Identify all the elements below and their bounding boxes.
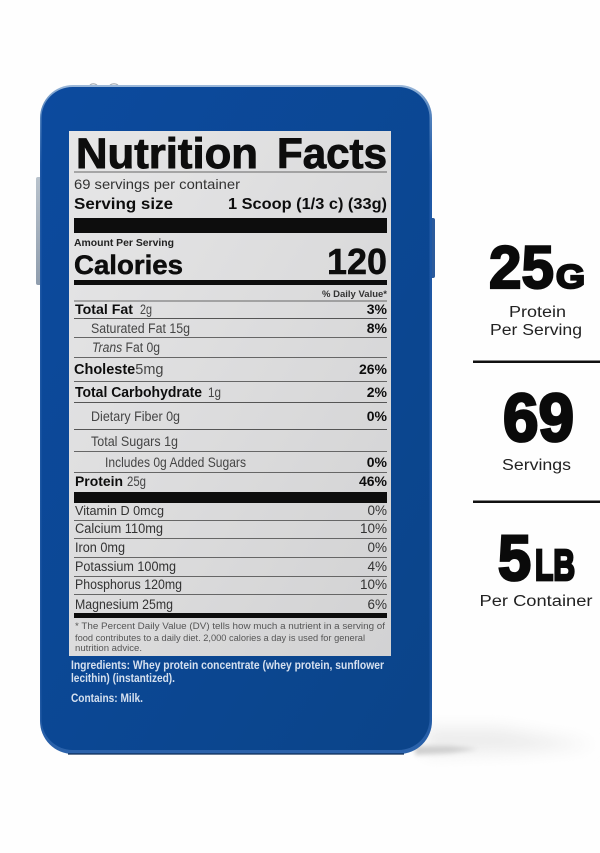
footnote: [75, 621, 386, 653]
case body: [40, 85, 432, 754]
nutrient rows: 25g: [127, 473, 146, 489]
serving size: Serving size: [74, 196, 173, 213]
nutrient rows: Saturated Fat 15g: [91, 321, 190, 336]
nutrient rows: Total Sugars 1g: [91, 433, 178, 449]
nutrient rows: Total Carbohydrate: [75, 385, 202, 401]
nutrient rows: 46%: [359, 473, 388, 489]
vitamins and minerals: Phosphorus 120mg: [75, 577, 182, 592]
amount per serving: Amount Per Serving: [74, 238, 174, 249]
nutrient rows: 1g: [208, 384, 221, 400]
nutrient rows: Dietary Fiber 0g: [91, 408, 180, 424]
ingredients text: lecithin) (instantized).: [71, 673, 175, 685]
vitamins and minerals: Iron 0mg: [75, 540, 125, 555]
stat label: protein per serving: Protein: [509, 304, 566, 321]
nutrient rows: Total Fat: [75, 301, 133, 317]
stat label: protein per serving: [490, 304, 582, 339]
vitamins and minerals: Magnesium 25mg: [75, 597, 173, 612]
vitamins and minerals: Calcium 110mg: [75, 521, 163, 536]
calories: Calories: [74, 250, 183, 280]
vitamins and minerals: 0%: [367, 503, 387, 518]
ingredients text: [71, 660, 384, 705]
calories: 120: [327, 241, 387, 282]
vitamins and minerals: [74, 503, 387, 612]
side button: left: [36, 177, 42, 285]
side button: right: [430, 218, 435, 278]
daily value header: % Daily Value*: [322, 289, 387, 300]
footnote: food contributes to a daily diet. 2,000 calories a day is used for general: [75, 633, 365, 643]
title: Nutrition: [76, 130, 258, 178]
vitamins and minerals: 6%: [367, 597, 387, 612]
stat value: 5LB: 5: [498, 522, 531, 594]
title: Facts: [277, 130, 387, 178]
nutrient rows: 0%: [367, 408, 388, 424]
serving size: [74, 196, 387, 213]
stat label: protein per serving: Per Serving: [490, 322, 582, 339]
vitamins and minerals: 0%: [367, 540, 387, 555]
vitamins and minerals: 10%: [360, 577, 387, 592]
title: [76, 130, 387, 178]
vitamins and minerals: Vitamin D 0mcg: [75, 503, 164, 518]
stat value: 69: 69: [503, 380, 574, 456]
nutrient rows: 26%: [359, 361, 388, 377]
nutrient rows: Trans Fat 0g: [92, 340, 160, 355]
nutrient rows: [74, 300, 388, 489]
stat value: 25G: G: [556, 258, 585, 295]
stat: per container: [480, 522, 592, 610]
stat: protein per serving: [489, 234, 585, 339]
stat value: 25G: [489, 234, 585, 301]
stat label: per container: Per Container: [480, 593, 592, 610]
nutrient rows: Protein: [75, 473, 123, 489]
nutrient rows: Choleste5mg: [74, 362, 163, 378]
vitamins and minerals: Potassium 100mg: [75, 559, 176, 574]
case bottom edge: [68, 753, 404, 755]
ingredients text: Contains: Milk.: [71, 693, 143, 705]
ingredients text: Ingredients: Whey protein concentrate (whey protein, sunflower: [71, 660, 384, 672]
nutrient rows: 3%: [367, 301, 388, 317]
serving size: 1 Scoop (1/3 c) (33g): [228, 196, 387, 213]
servings per container: 69 servings per container: [74, 176, 240, 192]
case shadow: [415, 728, 595, 755]
label background: [69, 131, 391, 656]
footnote: * The Percent Daily Value (DV) tells how much a nutrient in a serving of: [75, 621, 386, 631]
panel: nutrition label: [69, 130, 391, 656]
nutrient rows: 8%: [367, 320, 388, 336]
vitamins and minerals: 10%: [360, 521, 387, 536]
footnote: nutrition advice.: [75, 643, 142, 653]
calories: [74, 241, 387, 282]
nutrient rows: Includes 0g Added Sugars: [105, 454, 246, 470]
stat value: 5LB: LB: [535, 541, 575, 590]
nutrient rows: 2%: [367, 384, 388, 400]
stat label: servings: Servings: [502, 457, 571, 474]
stat value: 25G: 25: [489, 234, 554, 301]
case face: [42, 87, 430, 750]
product case: [36, 84, 435, 754]
vitamins and minerals: 4%: [367, 559, 387, 574]
stat: servings: [502, 380, 574, 474]
top buttons: [90, 84, 118, 85]
nutrient rows: 0%: [367, 454, 388, 470]
nutrient rows: 2g: [140, 301, 152, 317]
stat value: 5LB: [498, 522, 575, 594]
